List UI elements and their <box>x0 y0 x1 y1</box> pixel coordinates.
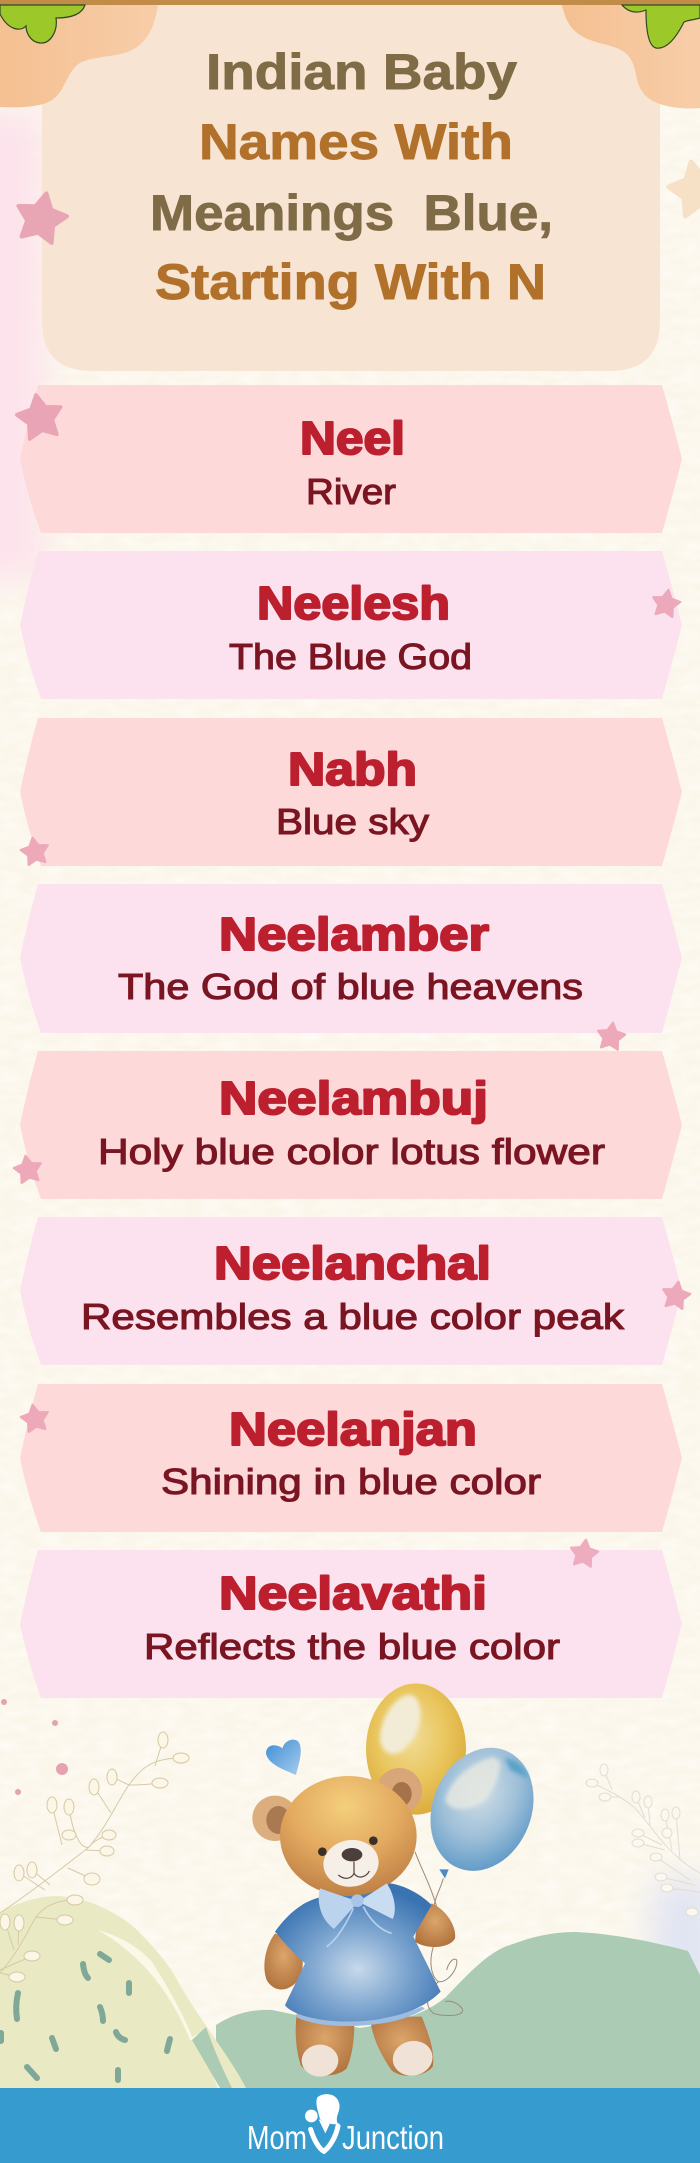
name card: Neelambuj: Neelambuj <box>219 1072 488 1124</box>
logo: MomJunction <box>247 2094 444 2156</box>
icon: yellow balloon <box>366 1683 466 1815</box>
name card: Neelavathi: Reflects the blue color <box>144 1626 560 1667</box>
name card: Neelesh: The Blue God <box>229 636 472 677</box>
bear: ears <box>252 1768 422 1841</box>
footer bar <box>0 2088 700 2163</box>
name card: Nabh: Nabh <box>288 743 417 795</box>
name card: Neelamber: Neelamber <box>219 908 489 960</box>
bear: head <box>280 1776 417 1896</box>
bear: muzzle <box>320 1836 382 1890</box>
highlight stripe <box>98 1930 224 2088</box>
name card: Neelavathi: Neelavathi <box>219 1567 487 1619</box>
title text: Names With <box>199 114 513 170</box>
name card: Neelanchal: Neelanchal <box>214 1237 491 1289</box>
logo icon: mother and child <box>305 2094 340 2151</box>
logo wordmark: Mom <box>247 2119 307 2156</box>
title text <box>150 44 553 310</box>
landscape hills <box>0 1896 700 2088</box>
icon: blue balloon <box>413 1732 551 1887</box>
bear: nose <box>342 1848 362 1861</box>
hill: green <box>216 1932 700 2088</box>
name card: Nabh: Blue sky <box>276 801 429 842</box>
name card: Neelambuj <box>20 1051 682 1199</box>
name card: Neel: Neel <box>300 412 405 464</box>
twig: left <box>0 1732 189 1982</box>
corner blob: top right <box>562 5 700 108</box>
title panel <box>0 5 700 371</box>
name card: Neelesh <box>20 551 682 699</box>
corner blob: top left <box>0 5 158 107</box>
balloon strings <box>415 1852 463 2016</box>
name card: Neelamber: The God of blue heavens <box>118 966 583 1007</box>
name card: Neelanchal <box>20 1217 682 1365</box>
dots <box>1 1699 68 1795</box>
bear: eyes <box>318 1836 378 1856</box>
hill: wedge of green <box>192 2027 232 2088</box>
bear: bow <box>319 1883 395 1947</box>
name card: Neelanchal: Resembles a blue color peak <box>81 1296 625 1337</box>
name card: Neelamber <box>20 884 682 1033</box>
icon: blue heart <box>266 1740 301 1775</box>
logo wordmark: Junction <box>342 2119 444 2156</box>
bear: legs <box>296 2013 436 2079</box>
hill: lime <box>0 1896 246 2088</box>
name card: Neelavathi <box>20 1550 682 1698</box>
name card: Neelanjan <box>20 1384 682 1532</box>
top bar <box>0 0 700 5</box>
twig: right <box>586 1764 700 1916</box>
bear: arms <box>264 1903 455 1990</box>
bear: dress <box>275 1883 441 2026</box>
name card: Neel <box>20 385 682 533</box>
name card: Neel: River <box>306 471 396 512</box>
name card: Neelambuj: Holy blue color lotus flower <box>98 1131 605 1172</box>
title text: Indian Baby <box>206 44 517 100</box>
title text: Starting With N <box>155 254 546 310</box>
title text: Meanings Blue, <box>150 185 553 241</box>
name card: Nabh <box>20 718 682 866</box>
name card: Neelanjan: Neelanjan <box>229 1403 477 1455</box>
icon: teddy bear with balloons <box>252 1683 551 2079</box>
decorative stars <box>12 156 700 1567</box>
hill dashes <box>1 1954 170 2080</box>
name card: Neelanjan: Shining in blue color <box>161 1461 541 1502</box>
logo wordmark <box>247 2119 444 2156</box>
bear: mouth <box>338 1862 369 1878</box>
name card: Neelesh: Neelesh <box>257 577 450 629</box>
panel: title background <box>42 5 660 371</box>
